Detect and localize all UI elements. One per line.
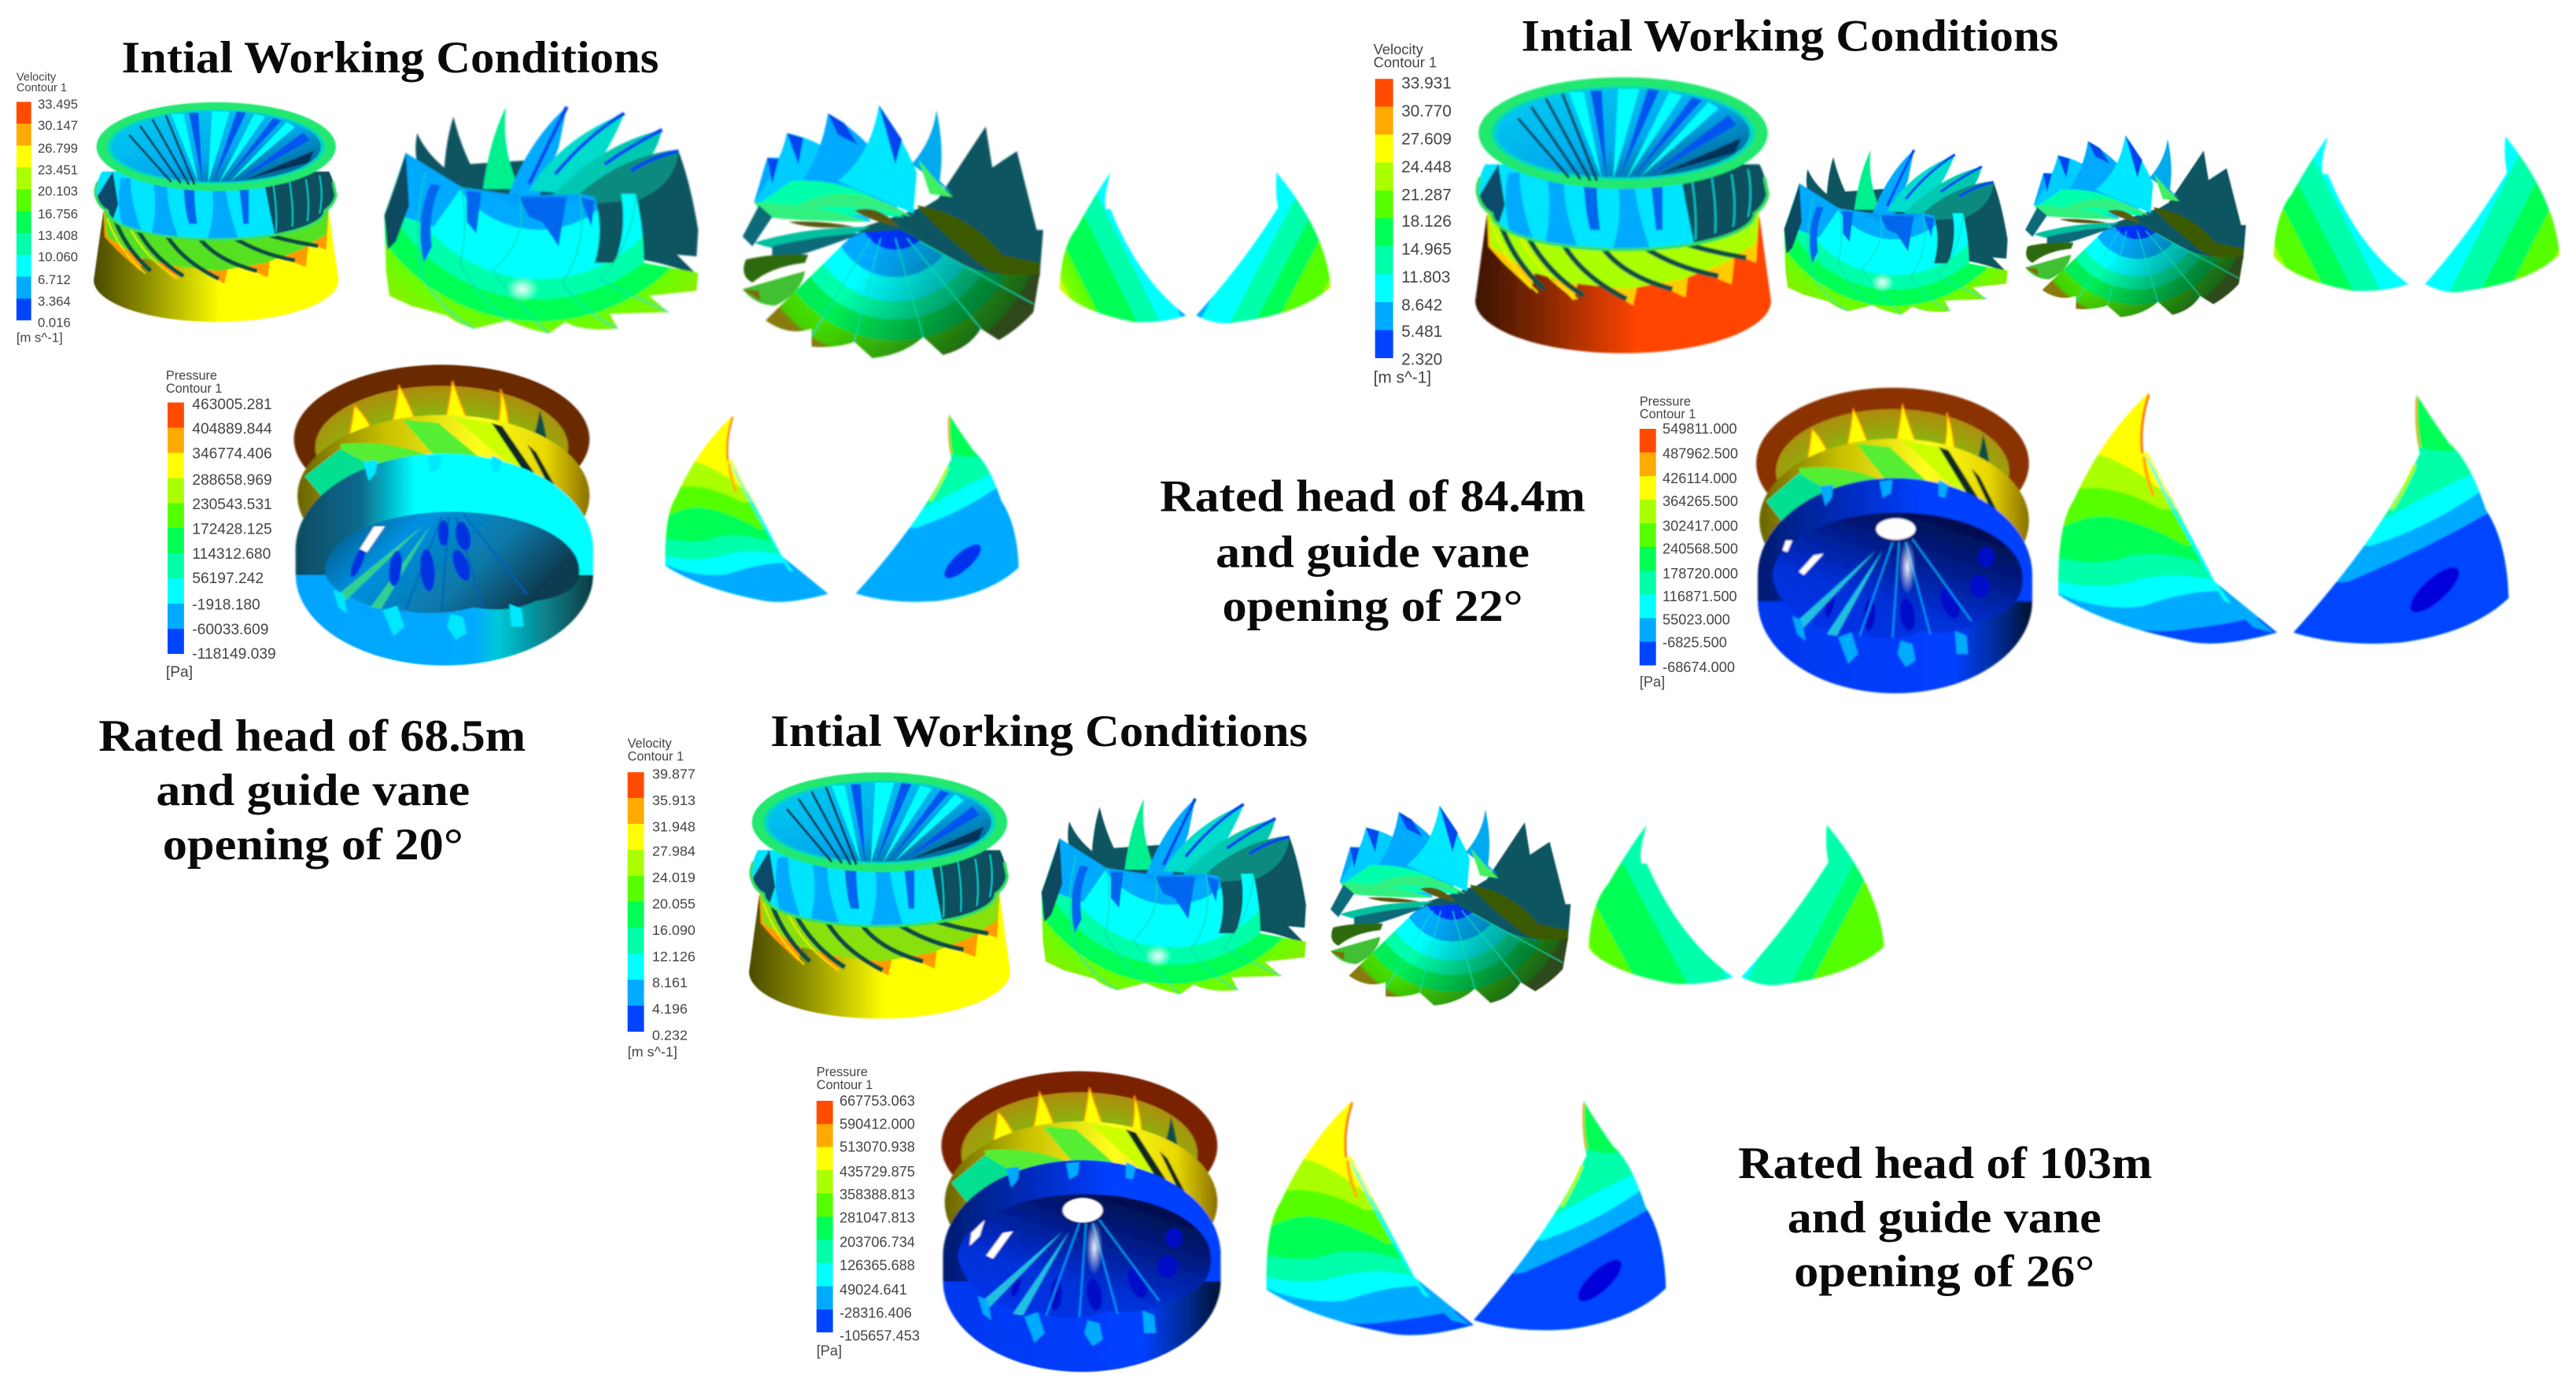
blades: velocity contour from below xyxy=(1330,805,1570,1006)
velocity legend: 23.451 xyxy=(38,162,78,177)
blades: velocity contour from below xyxy=(743,105,1043,358)
velocity legend: 16.090 xyxy=(652,922,696,938)
velocity legend: 13.408 xyxy=(38,228,78,243)
pressure legend: Pressure xyxy=(1640,395,1691,409)
caption: rated head 103 m: and guide vane xyxy=(1788,1193,2102,1243)
single blade pair: pressure xyxy=(2037,378,2530,657)
caption: rated head 103 m: Rated head of 103m xyxy=(1738,1139,2152,1188)
velocity legend: 12.126 xyxy=(652,948,696,964)
pressure legend: 114312.680 xyxy=(192,546,271,563)
runner: velocity contour with shroud xyxy=(1475,77,1774,353)
blades: velocity contour xyxy=(1784,150,2008,315)
velocity legend: 10.060 xyxy=(38,249,78,264)
blades: velocity contour from below xyxy=(2025,135,2246,317)
single blade pair: velocity xyxy=(1589,825,1884,985)
velocity legend: [m s^-1] xyxy=(17,330,63,345)
velocity legend: 20.055 xyxy=(652,896,696,912)
velocity legend: 33.931 xyxy=(1401,75,1452,93)
velocity legend: 14.965 xyxy=(1401,241,1452,259)
velocity legend: 39.877 xyxy=(652,766,696,782)
pressure legend: 404889.844 xyxy=(192,421,272,438)
velocity legend: 18.126 xyxy=(1401,212,1452,231)
velocity legend: 35.913 xyxy=(652,792,696,808)
velocity legend: 6.712 xyxy=(38,272,71,287)
pressure legend: 126365.688 xyxy=(840,1258,915,1273)
velocity legend: 5.481 xyxy=(1401,323,1442,341)
pressure legend: 281047.813 xyxy=(840,1210,915,1225)
heading: initial working conditions: Intial Working Conditions xyxy=(770,707,1308,756)
runner: velocity contour with shroud xyxy=(749,773,1013,1018)
velocity legend: [m s^-1] xyxy=(1374,368,1431,386)
pressure legend xyxy=(166,368,276,681)
pressure legend: 549811.000 xyxy=(1663,421,1737,437)
pressure legend: 116871.500 xyxy=(1663,589,1737,604)
caption: rated head 68.5 m: Rated head of 68.5m xyxy=(98,711,526,761)
runner: pressure contour xyxy=(941,1071,1220,1372)
velocity legend: Velocity xyxy=(1374,41,1424,57)
velocity legend: 33.495 xyxy=(38,97,78,112)
pressure legend: -1918.180 xyxy=(192,597,260,614)
velocity legend: 11.803 xyxy=(1401,268,1450,286)
velocity legend: 24.019 xyxy=(652,870,696,885)
runner: velocity contour with shroud xyxy=(94,102,341,322)
pressure legend: 49024.641 xyxy=(840,1282,907,1298)
velocity legend: 27.609 xyxy=(1401,131,1452,149)
velocity legend: 26.799 xyxy=(38,141,78,156)
velocity legend: 4.196 xyxy=(652,1001,688,1017)
panel: rated head 103 m, guide vane 26 degrees xyxy=(628,707,2152,1372)
runner: pressure contour xyxy=(1756,388,2032,693)
single blade pair: pressure xyxy=(1246,1086,1685,1348)
single blade pair: velocity xyxy=(1060,172,1330,323)
pressure legend: 426114.000 xyxy=(1663,471,1737,486)
pressure legend: 590412.000 xyxy=(840,1116,915,1132)
velocity legend: 0.016 xyxy=(38,315,71,330)
velocity legend: 8.161 xyxy=(652,975,688,991)
pressure legend: 203706.734 xyxy=(840,1235,915,1250)
velocity legend: 24.448 xyxy=(1401,158,1452,176)
velocity legend: 2.320 xyxy=(1401,350,1442,368)
caption: rated head 84.4 m: Rated head of 84.4m xyxy=(1160,471,1585,521)
velocity legend xyxy=(17,71,78,345)
velocity legend: 20.103 xyxy=(38,183,78,198)
pressure legend: [Pa] xyxy=(166,664,193,681)
pressure legend: 55023.000 xyxy=(1663,611,1730,627)
blades: velocity contour xyxy=(385,107,698,334)
pressure legend: 358388.813 xyxy=(840,1187,915,1202)
caption: rated head 103 m: opening of 26° xyxy=(1794,1247,2094,1297)
pressure legend: Contour 1 xyxy=(1640,407,1696,421)
pressure legend: -68674.000 xyxy=(1663,659,1735,675)
pressure legend: -60033.609 xyxy=(192,622,268,638)
caption: rated head 68.5 m: opening of 20° xyxy=(163,820,463,870)
velocity legend: 30.770 xyxy=(1401,102,1452,120)
velocity legend: 8.642 xyxy=(1401,297,1442,315)
single blade pair: pressure xyxy=(650,401,1035,612)
pressure legend: Contour 1 xyxy=(166,382,222,396)
velocity legend: 16.756 xyxy=(38,207,78,222)
pressure legend: -6825.500 xyxy=(1663,635,1727,651)
pressure legend: 172428.125 xyxy=(192,522,272,538)
pressure legend: 364265.500 xyxy=(1663,493,1738,509)
velocity legend: Contour 1 xyxy=(628,750,684,764)
velocity legend: [m s^-1] xyxy=(628,1043,677,1059)
heading: initial working conditions: Intial Working Conditions xyxy=(1521,12,2058,61)
panel: rated head 84.4 m, guide vane 22 degrees xyxy=(1160,12,2559,693)
pressure legend xyxy=(1640,395,1738,690)
pressure legend xyxy=(817,1065,920,1358)
velocity legend: Contour 1 xyxy=(1374,54,1437,71)
pressure legend: 230543.531 xyxy=(192,497,272,513)
pressure legend: 513070.938 xyxy=(840,1139,915,1155)
pressure legend: Contour 1 xyxy=(817,1078,873,1092)
pressure legend: 240568.500 xyxy=(1663,541,1738,557)
pressure legend: Pressure xyxy=(166,368,217,382)
velocity legend: 27.984 xyxy=(652,844,696,859)
velocity legend xyxy=(628,737,696,1059)
pressure legend: 302417.000 xyxy=(1663,518,1738,534)
velocity legend: 21.287 xyxy=(1401,187,1452,205)
pressure legend: 435729.875 xyxy=(840,1164,915,1180)
pressure legend: 487962.500 xyxy=(1663,445,1738,461)
pressure legend: -118149.039 xyxy=(192,646,276,663)
pressure legend: -105657.453 xyxy=(840,1328,920,1344)
panel: rated head 68.5 m, guide vane 20 degrees xyxy=(17,33,1330,870)
velocity legend: Velocity xyxy=(17,71,57,83)
velocity legend: 0.232 xyxy=(652,1028,688,1043)
velocity legend: Velocity xyxy=(628,737,673,751)
pressure legend: -28316.406 xyxy=(840,1305,912,1320)
caption: rated head 84.4 m xyxy=(1160,471,1585,631)
pressure legend: 463005.281 xyxy=(192,397,272,413)
pressure legend: [Pa] xyxy=(817,1343,842,1358)
caption: rated head 68.5 m: and guide vane xyxy=(156,766,470,815)
blades: velocity contour xyxy=(1042,799,1306,995)
caption: rated head 103 m xyxy=(1738,1139,2152,1297)
heading: initial working conditions: Intial Working Conditions xyxy=(122,33,659,83)
single blade pair: velocity xyxy=(2274,136,2559,292)
caption: rated head 84.4 m: and guide vane xyxy=(1216,527,1530,577)
pressure legend: 346774.406 xyxy=(192,445,272,462)
pressure legend: [Pa] xyxy=(1640,674,1665,690)
velocity legend: 30.147 xyxy=(38,118,78,133)
runner: pressure contour xyxy=(294,365,593,666)
velocity legend: Contour 1 xyxy=(17,82,67,94)
pressure legend: 288658.969 xyxy=(192,472,272,489)
pressure legend: 667753.063 xyxy=(840,1093,915,1109)
velocity legend: 31.948 xyxy=(652,818,696,834)
pressure legend: 178720.000 xyxy=(1663,566,1738,582)
velocity legend xyxy=(1374,41,1452,386)
caption: rated head 84.4 m: opening of 22° xyxy=(1222,582,1523,631)
caption: rated head 68.5 m xyxy=(98,711,526,870)
pressure legend: Pressure xyxy=(817,1065,868,1079)
pressure legend: 56197.242 xyxy=(192,571,264,587)
velocity legend: 3.364 xyxy=(38,294,71,308)
